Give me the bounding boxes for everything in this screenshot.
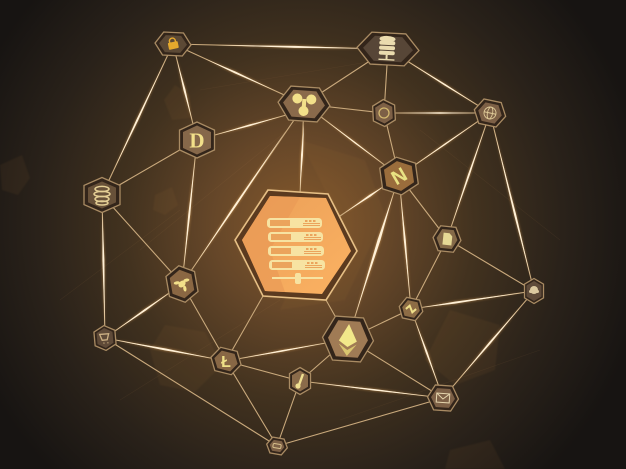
node: database	[356, 31, 420, 67]
node: cart	[93, 325, 117, 351]
icon: exchange arrows	[379, 108, 389, 118]
node: dogecoin	[180, 122, 214, 158]
icon: globe	[483, 106, 497, 120]
icon: N letter: N	[388, 164, 411, 190]
faint background lines	[60, 60, 560, 420]
node: globe	[472, 97, 508, 129]
node: bottom	[265, 436, 289, 456]
node: cloud	[524, 278, 544, 304]
node: litecoin	[208, 346, 244, 376]
glowing line highlights	[102, 45, 531, 396]
icon: database stack	[378, 36, 396, 61]
faint background hexagons	[0, 85, 505, 469]
icon: shopping cart	[100, 334, 109, 343]
node: ethereum	[321, 315, 375, 363]
icon: bee	[173, 278, 191, 293]
node: mail	[427, 384, 459, 412]
central server hexagon	[235, 190, 357, 300]
icon: D letter: D	[189, 128, 205, 152]
icon: padlock	[167, 37, 179, 50]
icon: bar	[273, 443, 281, 449]
icon: key	[295, 374, 303, 389]
icon: litecoin letter: Ł	[221, 354, 231, 371]
icon: cloud upload	[529, 286, 539, 294]
node: document	[432, 225, 462, 253]
node: key	[290, 368, 310, 394]
node: arrows circle	[372, 99, 396, 127]
connection lines	[102, 44, 534, 446]
node: small arrow	[397, 296, 425, 322]
icon: zigzag arrow	[405, 305, 417, 313]
icon: document	[442, 233, 453, 245]
icon: envelope	[436, 393, 450, 403]
node: bee	[165, 263, 199, 305]
icon: server rack	[267, 218, 325, 284]
node: ripple	[277, 85, 331, 123]
icon: ethereum diamond	[338, 323, 358, 357]
node: N coin	[379, 155, 419, 197]
node: coins	[84, 178, 120, 212]
node: lock	[154, 32, 192, 56]
icon: coin stack	[94, 186, 110, 205]
icon: ripple symbol	[291, 93, 317, 117]
